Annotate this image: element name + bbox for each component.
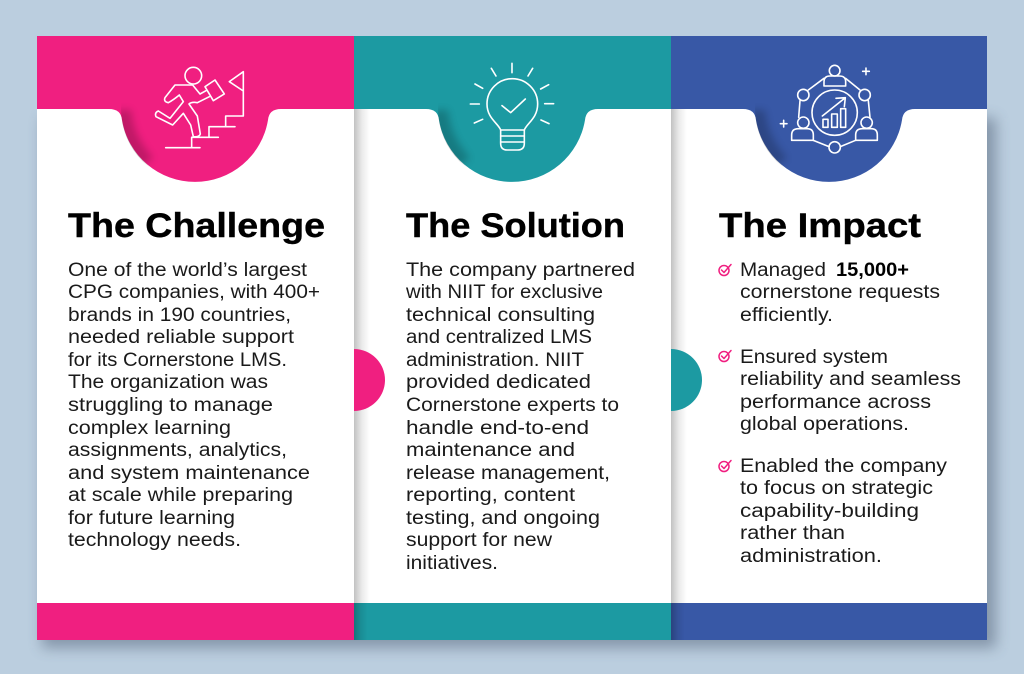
text block: solution description xyxy=(405,260,635,574)
bullet: system reliability: global operations. xyxy=(740,414,909,435)
bullet: system reliability: performance across xyxy=(740,392,931,413)
text block: solution description: initiatives. xyxy=(406,553,498,574)
text block: challenge description: technology needs. xyxy=(68,530,241,551)
text block: solution description: support for new xyxy=(406,530,552,551)
text block: solution description: and centralized LMS xyxy=(406,327,592,348)
text block: solution description: Cornerstone experts to xyxy=(406,395,619,416)
side tab: teal xyxy=(671,349,702,411)
panel: the solution xyxy=(354,36,671,640)
semicircle shade: impact xyxy=(755,108,787,166)
text block: solution description: reporting, content xyxy=(406,485,576,506)
text block: challenge description xyxy=(68,260,320,551)
text block: solution description: maintenance and xyxy=(406,440,575,461)
text block: challenge description: complex learning xyxy=(68,418,231,439)
text block: solution description: handle end-to-end xyxy=(406,418,589,439)
footer band: challenge xyxy=(37,603,354,640)
panel: the impact xyxy=(671,36,987,640)
bullet: 15,000+ requests: efficiently. xyxy=(740,305,833,326)
heading: the solution: The Solution xyxy=(406,207,625,245)
text block: challenge description: for its Cornerstone LMS. xyxy=(68,350,287,371)
bullet: strategic focus: to focus on strategic xyxy=(740,478,933,499)
text block: solution description: The company partnered xyxy=(406,260,635,281)
icon: light bulb with check xyxy=(470,63,554,150)
text block: challenge description: at scale while preparing xyxy=(68,485,293,506)
text block: challenge description: assignments, analytics, xyxy=(68,440,287,461)
semicircle shade: solution xyxy=(438,108,470,166)
text block: solution description: testing, and ongoing xyxy=(406,508,600,529)
icon: check bullet xyxy=(719,460,731,472)
text block: solution description: technical consulting xyxy=(406,305,595,326)
text block: challenge description: brands in 190 countries, xyxy=(68,305,291,326)
text block: challenge description: One of the world’s largest xyxy=(68,260,308,281)
text block: challenge description: and system maintenance xyxy=(68,463,310,484)
bullet: system reliability: reliability and seamless xyxy=(740,369,961,390)
text block: solution description: with NIIT for exclusive xyxy=(405,282,603,303)
heading: the impact: The Impact xyxy=(719,207,921,245)
footer band: impact xyxy=(671,603,987,640)
icon: check bullet xyxy=(719,350,731,362)
text block: solution description: administration. NIIT xyxy=(406,350,584,371)
header band with semicircle: challenge xyxy=(37,36,354,182)
header band with semicircle: solution xyxy=(354,36,671,182)
text block: solution description: release management, xyxy=(406,463,610,484)
icon: check bullet xyxy=(719,264,731,276)
header band with semicircle: impact xyxy=(671,36,987,182)
bullet: strategic focus: capability-building xyxy=(740,501,919,522)
heading: the challenge: The Challenge xyxy=(68,207,325,245)
text block: challenge description: for future learning xyxy=(68,508,235,529)
side shadow cast by solution panel xyxy=(671,109,687,640)
text block: challenge description: The organization was xyxy=(68,372,268,393)
bullet: 15,000+ requests xyxy=(719,260,940,326)
panel: the challenge xyxy=(37,36,354,640)
panel body: challenge xyxy=(37,109,354,603)
bullet: strategic focus xyxy=(719,456,948,567)
text block: challenge description: CPG companies, with 400+ xyxy=(68,282,320,303)
text block: solution description: provided dedicated xyxy=(406,372,591,393)
side shadow cast by challenge panel xyxy=(354,109,370,640)
bullet: system reliability xyxy=(719,347,961,435)
semicircle shade: challenge xyxy=(116,110,153,168)
icon: person climbing stairs to flag xyxy=(156,67,243,148)
text block: challenge description: needed reliable support xyxy=(68,327,295,348)
bullet: strategic focus: administration. xyxy=(740,546,882,567)
outer card shadow xyxy=(42,118,996,648)
bullet: strategic focus: Enabled the company xyxy=(740,456,948,477)
bullet: 15,000+ requests: cornerstone requests xyxy=(740,282,940,303)
text block: challenge description: struggling to manage xyxy=(68,395,273,416)
bullet: strategic focus: rather than xyxy=(740,523,845,544)
bullet: 15,000+ requests: 15,000+ xyxy=(836,260,909,281)
bullet: 15,000+ requests: Managed xyxy=(740,260,826,281)
side tab: pink xyxy=(354,349,385,411)
footer band: solution xyxy=(354,603,671,640)
bullet: system reliability: Ensured system xyxy=(740,347,888,368)
panel body: impact xyxy=(671,109,987,603)
icon: people around growth chart xyxy=(780,65,877,153)
panel body: solution xyxy=(354,109,671,603)
